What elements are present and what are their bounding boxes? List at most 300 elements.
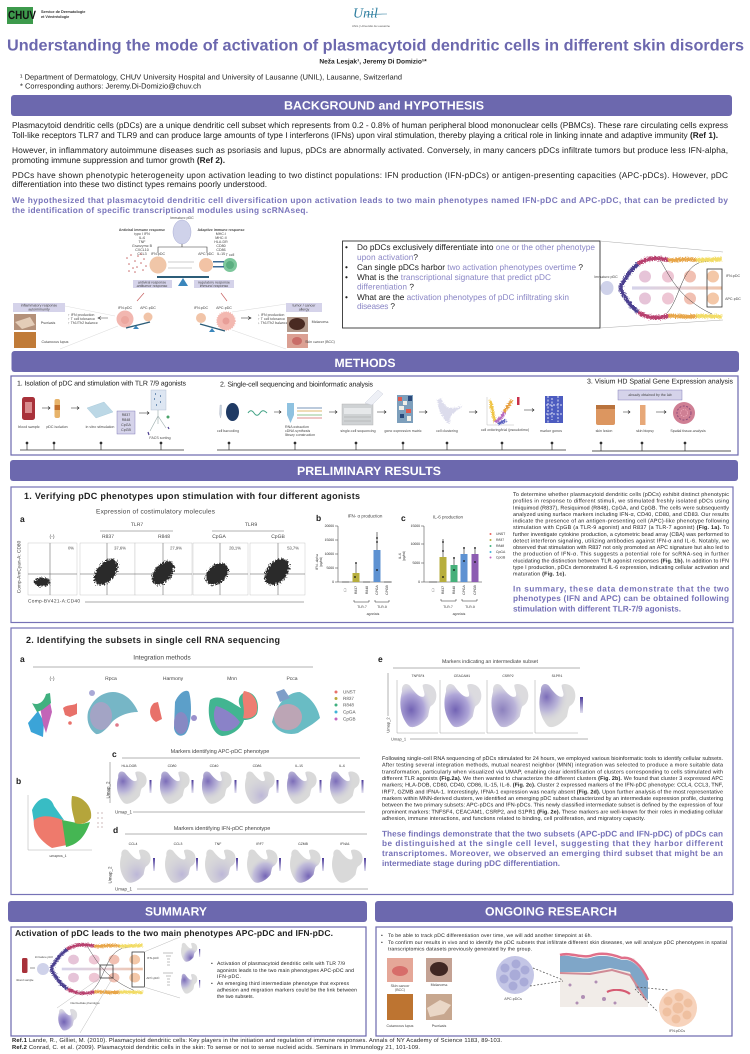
APC markers UMAPs: IL-6 <box>339 764 345 768</box>
integration methods UMAPs: Rpca <box>105 676 117 682</box>
affiliations: ¹ Department of Dermatology, CHUV University Hospital and University of Lausanne (UNIL), Lausanne, Switzerland <box>20 72 402 82</box>
icon: IFN-pDC and APC-pDC and T cell: IFN-pDC <box>151 252 165 256</box>
IFN markers UMAPs: TNF <box>215 842 221 846</box>
skin disease photos: Psoriasis <box>432 1024 446 1028</box>
panel: questions: diseases ? <box>357 301 395 311</box>
ongoing bullets: To confirm our results in vivo and to identify the pDC subsets that infiltrate different skin diseases, we will analyze pDC phenotypes in spatial <box>388 940 727 946</box>
APC markers UMAPs: Umap_1 <box>115 810 133 814</box>
lower right: cancer: ↓ Th1/Th2 balance <box>258 321 288 325</box>
list: adaptive response: MHC-I <box>216 232 226 236</box>
logo: Unil <box>352 6 390 28</box>
text block: result 1: Imiquimod (R837), Resiquimod (R848), CpGA, and CpGB. The cells were subsequently <box>513 505 729 511</box>
flow cytometry plots: TLR9 <box>245 522 257 528</box>
intermediate subset UMAPs: CSRP2 <box>502 674 514 678</box>
icon: APC-pDC cluster <box>496 956 534 1001</box>
APC markers UMAPs: CD86 <box>253 764 261 768</box>
flow cytometry plots: Comp-BV421-A:CD40 <box>28 598 80 604</box>
flow cytometry plots: 28,1% <box>229 546 241 550</box>
logo: CHUV <box>7 7 85 24</box>
lower left: autoimmunity: ↑ IFN production <box>68 313 94 317</box>
banner: summary: SUMMARY <box>145 904 207 918</box>
lower right: cancer: allergy <box>299 308 309 312</box>
IFN markers UMAPs <box>108 825 368 892</box>
text block: background: PDCs have shown phenotypic heterogeneity upon activation leading to two distinct populations: IFN production (IFN-pDCs) or antigen-presenting capacities (APC-pDCs). However, pDC <box>12 170 728 180</box>
step 3 icons: skin lesion <box>596 429 612 433</box>
summary bullets: • <box>211 961 213 967</box>
text block: result 1: type I production, pDCs demonstrated IL-6 expression, indicating cellular activation and <box>513 565 729 571</box>
clusters UMAP <box>16 776 103 858</box>
panel: questions: Do pDCs exclusively differentiate into one or the other phenotype <box>357 242 595 252</box>
APC markers UMAPs: IL-15 <box>295 764 303 768</box>
banner: preliminary results <box>10 460 738 481</box>
step 1 heading: 1. Isolation of pDC and stimulation with TLR 7/9 agonists <box>17 380 186 388</box>
text block: result 1: To determine whether plasmacytoid dendritic cells (pDCs) exhibit distinct phenotypic <box>513 492 729 498</box>
text block: result 2 <box>382 756 724 822</box>
integration methods UMAPs: Harmony <box>163 676 184 682</box>
conclusion: result 2: These findings demonstrate that the two subsets (APC-pDC and IFN-pDC) of pDCs can <box>382 830 723 838</box>
list: antiviral response: IL-6 <box>139 236 145 240</box>
logo: CHUV: CHUV <box>8 8 36 22</box>
arrows <box>137 293 227 301</box>
icon: immature pDC <box>170 216 194 244</box>
label boxes: antiviral response <box>138 280 166 284</box>
APC markers UMAPs: HLA-DOB <box>121 764 137 768</box>
ongoing bullets: transcriptomics datasets previously generated by the group. <box>388 946 532 952</box>
banner: preliminary results: PRELIMINARY RESULTS <box>297 464 441 478</box>
intermediate subset UMAPs: CEACAM1 <box>454 674 470 678</box>
lower right: cancer: tumor / cancer <box>293 304 316 308</box>
text block: result 1 <box>513 492 729 578</box>
icon: cytokine dots <box>126 253 147 273</box>
list: adaptive response: MHC-II <box>215 236 227 240</box>
step 2 icons: marker genes <box>540 429 562 433</box>
chart: IL-6 production: (pg/ml) <box>402 551 406 561</box>
logo: CHUV: Service de Dermatologie <box>41 10 85 14</box>
summary bullets: IFN-pDC. <box>217 974 241 980</box>
step 3 icons <box>596 390 706 433</box>
panel: questions: • <box>345 272 348 282</box>
list: adaptive response: CD80 <box>216 244 226 248</box>
IFN markers UMAPs: Umap_1 <box>115 886 133 892</box>
flow cytometry plots: R848 <box>158 534 170 540</box>
skin disease photos: Melanoma <box>431 983 447 987</box>
icon: IFN-pDC and APC-pDC and T cell <box>150 252 237 274</box>
list: antiviral response <box>119 228 165 256</box>
figure: summary trajectory: APC-pDC <box>146 976 160 980</box>
text block: result 2: markers within MNN-derived clusters, we identified an emerging pDC subset characterized by an intermediate expression profile, clustering <box>382 796 723 802</box>
lower left: autoimmunity: ↑ Th1/Th2 balance <box>68 321 98 325</box>
figure: summary trajectory: IFN-pDC <box>147 956 160 960</box>
step 2 icons: cDNA synthesis <box>285 429 310 433</box>
chart: IFN-alpha production: 0 <box>332 580 334 584</box>
panel: questions: Can single pDCs harbor two activation phenotypes overtime ? <box>357 262 583 272</box>
lower right: cancer <box>194 303 335 349</box>
integration methods UMAPs: Mnn <box>227 676 237 682</box>
APC markers UMAPs: Markers identifying APC-pDC phenotype <box>171 749 269 755</box>
chart: IFN-alpha production: (pg/ml) <box>319 557 323 567</box>
flow cytometry plots: 0% <box>68 546 74 550</box>
logo: Unil: Unil <box>353 6 378 22</box>
chart: IL-6 production: CPGB <box>473 584 477 595</box>
list: antiviral response: Antiviral immune response <box>119 228 165 232</box>
chart: IL-6 production: 5000 <box>412 561 420 565</box>
panel: questions: • <box>345 262 348 272</box>
chart: IL-6 production: IL-6 <box>398 553 402 559</box>
lower left: autoimmunity: Cutaneous lupus <box>42 340 69 344</box>
text block: background: differentiation into these two distinct types remains poorly understood. <box>12 179 267 189</box>
step 1 icons: R837 <box>122 413 130 417</box>
label boxes: antitumor response <box>137 284 167 288</box>
chart: IFN-alpha production: IFN- alpha <box>315 554 319 570</box>
APC markers UMAPs <box>106 749 365 814</box>
conclusion: result 2: intermediate stage during pDC differentiation. <box>382 859 560 868</box>
step 1 icons: pDC isolation <box>46 425 68 429</box>
summary bullets: • <box>211 981 213 987</box>
step 1 icons: CpGA <box>121 423 131 427</box>
intermediate subset UMAPs: Umap_2 <box>386 717 390 733</box>
legend: CpGA <box>496 550 506 554</box>
lower right: cancer: APC-pDC <box>216 306 232 310</box>
chart: IL-6 production: TLR-7 <box>443 605 453 609</box>
lower right: cancer: ↑ T cell tolerance <box>258 317 285 321</box>
flow cytometry plots: Expression of costimulatory molecules <box>96 508 216 516</box>
ongoing bullets: • <box>381 933 383 939</box>
chart: IL-6 production: (-) <box>431 588 435 592</box>
flow cytometry plots: CpGA <box>212 534 226 540</box>
conclusion: result 1: stimulation with different TLR-7/9 agonists. <box>513 604 681 614</box>
step 1 icons: blood sample <box>18 425 40 429</box>
heading: 1. Verifying pDC phenotypes upon stimulation with four different agonists <box>24 491 360 501</box>
text block: result 1: further investigate cytokine production, a cytometric bead array (CBA) was performed to <box>513 532 729 538</box>
banner: summary <box>8 901 367 922</box>
label boxes: regulatory response <box>198 280 230 284</box>
text block: result 1: elucidating the distinction between TLR agonist responses (Fig. 1b). In addition to IFN <box>513 558 729 564</box>
timelines <box>20 442 731 451</box>
text block: result 1: maturation (Fig. 1c). <box>513 572 566 578</box>
list: antiviral response: TNF <box>138 240 146 244</box>
figure: summary trajectory: Intermediate phenotype <box>70 1001 100 1005</box>
panel: questions: • <box>345 242 348 252</box>
panel: questions <box>342 241 600 328</box>
affiliations <box>20 72 402 90</box>
panel: questions: upon activation? <box>357 252 418 262</box>
conclusion: result 1: phenotypes (IFN and APC) can be obtained following <box>513 594 729 603</box>
IFN markers UMAPs: Markers identifying IFN-pDC phenotype <box>174 826 270 832</box>
lower right: cancer: ↓ IFN production <box>258 313 284 317</box>
step 2 icons: cell ordering/trial (pseudotime) <box>481 428 529 432</box>
step 3 icons: Spatial tissue analysis <box>670 429 706 433</box>
chart: IFN-alpha production: 15000 <box>325 538 334 542</box>
panel: questions: What is the transcriptional signature that predict pDC <box>357 272 551 282</box>
lower right: cancer: Melanoma <box>312 320 328 324</box>
legend: UNST <box>496 532 505 536</box>
summary bullets <box>211 961 357 1000</box>
flow cytometry plots: (-) <box>50 534 55 540</box>
list: adaptive response <box>198 228 244 256</box>
label boxes: immune response <box>200 284 228 288</box>
figure: differentiation trajectory <box>594 241 741 328</box>
histology image <box>560 954 648 1007</box>
IFN markers UMAPs: CCL4 <box>129 842 137 846</box>
chart: IFN-alpha production: agonists <box>367 612 380 616</box>
text block: result 1: indicate the presence of an antigen-presenting cell (APC)-like phenotype following <box>513 518 729 524</box>
chart: IL-6 production: 10000 <box>411 542 420 546</box>
legend: CpGB <box>496 556 506 560</box>
integration methods UMAPs: (-) <box>50 676 55 682</box>
text block: result 2: prominent markers: TNFSF4, CEACAM1, CSRP2, and S1PR1 (Fig. 2e). These markers are well-known for their roles in mediating cellular <box>382 809 723 815</box>
legend: R848 <box>343 702 354 708</box>
IFN markers UMAPs: d <box>113 825 118 835</box>
legend: CpGA <box>343 710 356 714</box>
summary bullets: adhesion and migration markers could be the link between <box>217 988 357 994</box>
APC markers UMAPs: c <box>112 749 117 759</box>
intermediate subset UMAPs <box>378 654 588 742</box>
lower left: autoimmunity: inflammatory response <box>21 304 57 308</box>
summary bullets: Activation of plasmacytoid dendritic cells with TLR 7/9 <box>217 961 345 967</box>
intermediate subset UMAPs: S1PR1 <box>552 674 562 678</box>
text block: result 2: IRF7, GZMB and IFNA-1. Interestingly, IFNA-1 expression was nearly absent (Fig. 2d). Upon further analysis of the most representative <box>382 789 723 795</box>
flow cytometry plots <box>16 508 305 604</box>
icon: balance <box>157 276 209 286</box>
conclusion: result 1: In summary, these data demonstrate that the two <box>513 584 729 594</box>
chart: IFN-alpha production: 10000 <box>325 552 334 556</box>
lower left: autoimmunity <box>13 303 156 349</box>
flow cytometry plots: a <box>20 514 25 524</box>
flow cytometry plots: 37,6% <box>114 546 126 550</box>
skin disease photos: (BCC) <box>395 988 405 992</box>
ongoing bullets: • <box>381 940 383 946</box>
step 2 icons: RNA extraction <box>285 425 309 429</box>
logo: CHUV: et Vénéréologie <box>41 15 69 19</box>
chart: IL-6 production: TLR-9 <box>465 605 475 609</box>
list: antiviral response: CXCL10 <box>135 248 149 252</box>
text block: result 1: observed that stimulation with R837 not only promoted an APC signature but also led to <box>513 545 729 551</box>
flow cytometry plots: 53,7% <box>287 546 299 550</box>
text block: background: Plasmacytoid dendritic cells (pDCs) are a unique dendritic cell subset which represents from 0.2 - 0.8% of human peripheral blood mononuclear cells (PBMCs). These rare circulating cells express <box>12 120 728 130</box>
text block: background: Toll-like receptors TLR7 and TLR9 and can produce large amounts of type I interferons (IFNs) upon viral stimulation, thereby playing a critical role in linking innate and adaptive immunity (Ref 1). <box>12 130 718 140</box>
chart: IFN-alpha production: b <box>316 513 321 523</box>
chart: IL-6 production: agonists <box>453 612 466 616</box>
step 2 heading: 2. Single-cell sequencing and bioinformatic analysis <box>220 380 374 388</box>
step 2 icons: library construction <box>285 433 315 437</box>
lower right: cancer: IFN-pDC <box>194 306 208 310</box>
flow cytometry plots: TLR7 <box>131 522 143 528</box>
chart: IFN-alpha production: TLR-7 <box>357 605 367 609</box>
panel: questions: What are the activation phenotypes of pDC infiltrating skin <box>357 292 569 302</box>
figure: differentiation trajectory: APC-pDC <box>725 297 741 301</box>
list: adaptive response: CD86 <box>216 248 226 252</box>
IFN markers UMAPs: CCL3 <box>174 842 182 846</box>
lower right: cancer: Skin cancer (BCC) <box>305 340 335 344</box>
summary bullets: An emerging third intermediate phenotype that express <box>217 981 349 987</box>
text block: result 2: between the two primary subsets: APC-pDCs and IFN-pDCs. This newly classified intermediate subset is defined by the expression of four <box>382 803 723 809</box>
conclusion: result 2: be distinguished at the single cell level, suggesting that they harbor different <box>382 839 723 848</box>
APC markers UMAPs: CD80 <box>168 764 176 768</box>
label boxes <box>133 280 234 288</box>
hypothesis: the identification of specific transcriptional modules using scRNAseq. <box>12 205 308 215</box>
text block: result 2: After testing several integration methods, mutual nearest neighbor (MNN) integration was selected to produce a more suitable data <box>382 763 723 769</box>
references: Ref.1 Lande, R., Gilliet, M. (2010). Plasmacytoid dendritic cells: Key players in the initiation and regulation of immune responses. Annals of NY Academy of Science 1183, 89-103. <box>12 1037 502 1044</box>
clusters UMAP: b <box>16 776 21 786</box>
integration methods UMAPs: a <box>20 654 25 664</box>
text block: background: However, in inflammatory autoimmune diseases such as psoriasis and lupus, pDCs are abnormally activated. Conversely, in many cancers pDCs infiltrate tumors but produce less IFN-alpha, <box>12 145 728 155</box>
icon: APC-pDC cluster: APC-pDCs <box>504 997 522 1001</box>
hypothesis: We hypothesized that plasmacytoid dendritic cell diversification upon activation leads to two main phenotypes named IFN-pDC and APC-pDC, that can be predicted by <box>12 195 728 205</box>
panel: summary <box>11 927 366 1036</box>
icon: immature pDC: Immature pDC <box>170 216 194 220</box>
chart: IFN-alpha production <box>315 513 392 616</box>
lower left: autoimmunity: ↑ T cell tolerance <box>68 317 95 321</box>
list: adaptive response: HLA-DR <box>214 240 228 244</box>
conclusion: result 2 <box>382 830 723 868</box>
integration methods UMAPs: Pcca <box>286 676 298 682</box>
icon: IFN-pDC cluster <box>659 989 697 1033</box>
step 1 icons: in vitro stimulation <box>86 425 114 429</box>
APC markers UMAPs: Umap_2 <box>106 781 110 799</box>
text block: result 1: analyzed using surface markers including IFN-α, CD40, CD80, and CD83. Our results <box>513 512 729 518</box>
clusters UMAP: umapres_1 <box>50 854 67 858</box>
chart: IL-6 production: CPGA <box>462 584 466 595</box>
figure: differentiation trajectory: Immature pDC <box>594 275 618 279</box>
step 2 icons: cell clustering <box>436 429 458 433</box>
figure: summary trajectory: Immature pDC <box>35 955 53 959</box>
skin disease photos: Cutaneous lupus <box>387 1024 414 1028</box>
text block: result 2: Following single-cell RNA sequencing of pDCs stimulated for 24 hours, we employed various bioinformatic tools to identify cellular subsets. <box>382 756 723 762</box>
flow cytometry plots: Comp-AmCyan-A: CD80 <box>16 540 22 593</box>
figure: summary trajectory: Blood sample <box>17 978 34 982</box>
panel: questions: differentiation ? <box>357 282 414 292</box>
text block: result 1: detect interferon signaling, utilizing antibodies against IFN-α and IL-6. Notably, we <box>513 538 729 544</box>
list: antiviral response: type I IFN <box>134 232 150 236</box>
ongoing bullets <box>381 933 727 952</box>
references <box>12 1037 502 1051</box>
lower left: autoimmunity: autoimmunity <box>28 308 50 312</box>
icon: IFN-pDC and APC-pDC and T cell: APC-pDC <box>198 252 214 256</box>
chart: IFN-alpha production: 20000 <box>325 524 334 528</box>
list: antiviral response: Granzyme B <box>132 244 153 248</box>
authors: Neža Lesjak¹, Jeremy Di Domizio¹* <box>319 58 427 66</box>
banner: background and hypothesis: BACKGROUND and HYPOTHESIS <box>284 98 484 112</box>
figure: differentiation trajectory: IFN-pDC <box>726 274 740 278</box>
text block: result 1: stimulation with CpGB (a TLR-9 agonist) and R837 (a TLR-7 agonist) (Fig. 1a). To <box>513 525 729 531</box>
list: antiviral response: CCL3 <box>137 252 147 256</box>
legend <box>490 532 506 560</box>
legend: UNST <box>343 690 356 694</box>
flow cytometry plots: 27,9% <box>170 546 182 550</box>
heading: Activation of pDC leads to the two main phenotypes APC-pDC and IFN-pDC. <box>15 928 333 938</box>
chart: IL-6 production: 0 <box>418 580 420 584</box>
chart: IL-6 production <box>398 513 506 616</box>
step 1 icons <box>18 390 171 440</box>
text block: background: promoting immune suppression and tumor growth (Ref 2). <box>12 155 225 165</box>
text block: result 2: adhesion, immune interactions, and functions related to binding, cell proliferation, and migratory capacity. <box>382 816 645 822</box>
step 1 icons: FACS sorting <box>149 436 171 440</box>
chart: IFN-alpha production: (-) <box>343 588 347 592</box>
panel: methods <box>11 376 738 455</box>
text block: background <box>12 120 728 189</box>
chart: IL-6 production: R837 <box>441 586 445 594</box>
text block: result 2: different TLR agonists (Fig.2a). We then wanted to characterize the different clusters (Fig. 2b). We found that cluster 3 expressed APC <box>382 776 723 782</box>
chart: IL-6 production: IL-6 production <box>433 514 464 520</box>
step 3 icons: already obtained by the lab <box>628 393 672 397</box>
intermediate subset UMAPs: TNFSF4 <box>412 674 425 678</box>
integration methods UMAPs: Integration methods <box>133 654 191 662</box>
flow cytometry plots: CpGB <box>271 534 285 540</box>
skin disease photos <box>387 958 452 1028</box>
list: adaptive response: Adaptive immune response <box>198 228 244 232</box>
chart: IL-6 production: R848 <box>452 586 456 594</box>
chart: IFN-alpha production: R837 <box>354 586 358 594</box>
panel: ongoing research <box>376 927 732 1036</box>
step 2 icons: single-cell sequencing <box>340 429 376 433</box>
intermediate subset UMAPs: Umap_1 <box>391 736 407 742</box>
conclusion: result 2: transcriptomes. Moreover, we observed an emerging third subset that might be an <box>382 849 723 858</box>
lower left: autoimmunity: APC-pDC <box>140 306 156 310</box>
list: adaptive response: IL-15 <box>217 252 225 256</box>
IFN markers UMAPs: GZMB <box>298 842 309 846</box>
step 3 heading: 3. Visium HD Spatial Gene Expression analysis <box>587 378 734 386</box>
panel: result 2 <box>11 628 733 894</box>
chart: IL-6 production: 15000 <box>411 524 420 528</box>
icon: IFN-pDC and APC-pDC and T cell: T cell <box>226 253 234 257</box>
legend: R837 <box>496 538 504 542</box>
affiliations: * Corresponding authors: Jeremy.Di-Domizio@chuv.ch <box>20 82 201 90</box>
lower left: autoimmunity: Psoriasis <box>41 321 55 325</box>
banner: ongoing research <box>375 901 733 922</box>
conclusion: result 1 <box>513 584 729 614</box>
APC markers UMAPs: CD40 <box>210 764 218 768</box>
intermediate subset UMAPs: e <box>378 654 383 664</box>
lower left: autoimmunity: IFN-pDC <box>118 306 132 310</box>
banner: methods <box>12 351 739 372</box>
step 2 icons: gene expression matrix <box>384 429 422 433</box>
chart: IFN-alpha production: R848 <box>365 586 369 594</box>
IFN markers UMAPs: IFNA1 <box>340 842 350 846</box>
integration methods UMAPs <box>20 654 356 737</box>
heading: 2. Identifying the subsets in single cell RNA sequencing <box>26 635 280 645</box>
step 2 icons: cell barcoding <box>217 429 239 433</box>
banner: ongoing research: ONGOING RESEARCH <box>485 904 617 918</box>
chart: IFN-alpha production: CPGB <box>385 584 389 595</box>
text block: result 1: the production of IFN-α. This suggests a potential role for scRNA-seq in further <box>513 552 729 558</box>
summary bullets: the two subsets. <box>217 994 254 1000</box>
panel: questions: • <box>345 292 348 302</box>
step 1 icons: R848 <box>122 418 130 422</box>
text block: result 1: profiles in response to different stimuli, we stimulated freshly isolated pDCs using <box>513 499 729 505</box>
chart: IFN-alpha production: TLR-9 <box>377 605 387 609</box>
figure: summary trajectory <box>17 937 200 1033</box>
references: Ref.2 Conrad, C. et al. (2009). Plasmacytoid dendritic cells in the skin: To sense or not to sense nucleid acids. Seminars in Immunology 21, 101-109. <box>12 1044 420 1051</box>
text block: result 2: transformation, particularly when visualized via UMAP, enabling clear identification of clusters corresponding to cells stimulated with <box>382 769 723 775</box>
intermediate subset UMAPs: Markers indicating an intermediate subset <box>442 659 539 665</box>
icon: IFN-pDC cluster: IFN-pDCs <box>669 1029 685 1033</box>
dashed connectors <box>530 968 668 1012</box>
logo: Unil: UNIL | Université de Lausanne <box>352 24 390 28</box>
banner: methods: METHODS <box>334 356 396 370</box>
legend: R848 <box>496 544 504 548</box>
text block: result 2: markers; HLA-DOB, CD80, CD40, CD86, IL-15, IL-6. (Fig. 2c). Cluster 2 expressed markers of the IFN-pDC phenotype: CCL4, CCL3, TNF, <box>382 783 724 789</box>
chart: IFN-alpha production: IFN- α production <box>348 514 383 518</box>
step 3 icons: skin biopsy <box>636 429 654 433</box>
flow cytometry plots: R837 <box>102 534 114 540</box>
chart: IFN-alpha production: CPGA <box>375 584 379 595</box>
chart: IFN-alpha production: 5000 <box>326 566 334 570</box>
legend: R837 <box>343 696 354 701</box>
hypothesis <box>12 195 728 215</box>
IFN markers UMAPs: Umap_2 <box>108 866 112 884</box>
chart: IL-6 production: c <box>401 513 406 523</box>
skin disease photos: Skin cancer <box>391 984 410 988</box>
